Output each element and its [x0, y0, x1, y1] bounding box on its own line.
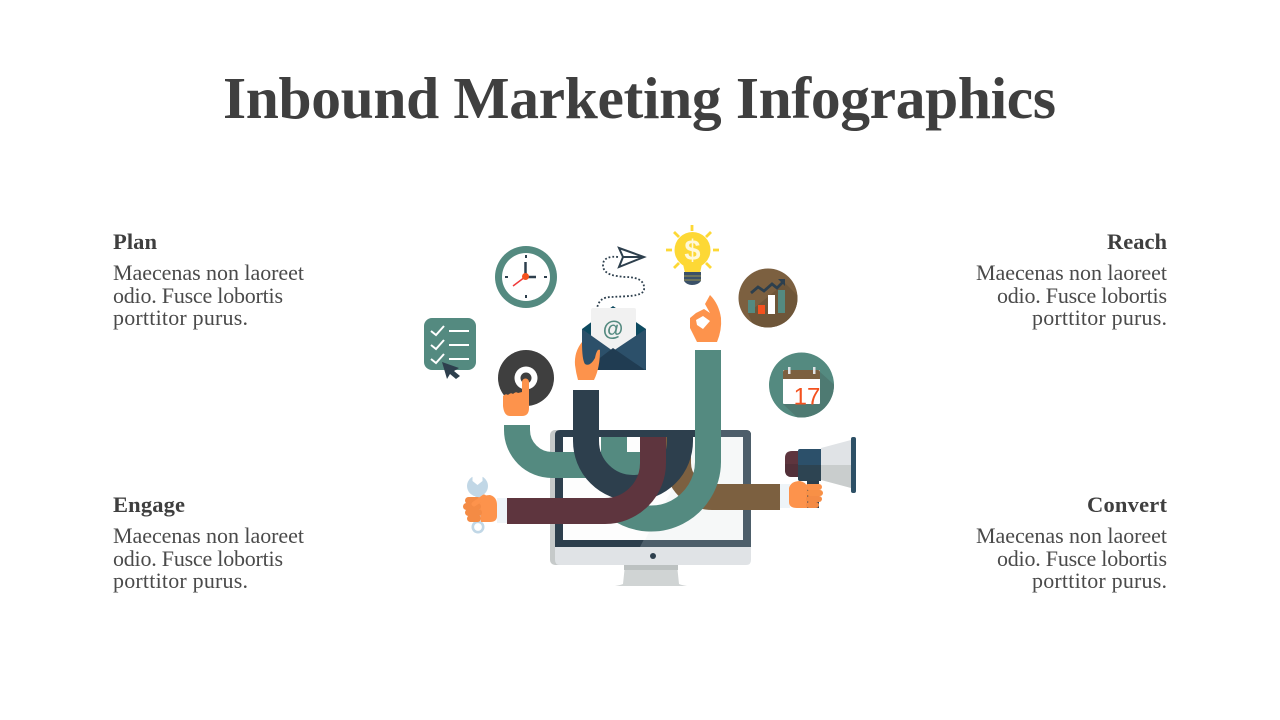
text block: Reach — [976, 229, 1167, 330]
icon: envelope: @ — [603, 318, 623, 341]
text block: Engage: Engage — [113, 492, 185, 517]
text block: Reach: porttitor purus. — [1032, 305, 1167, 330]
icon: hand with wrench — [463, 474, 507, 532]
icon: calendar badge: 17 — [794, 384, 820, 410]
monitor — [550, 430, 751, 586]
icon: megaphone — [785, 437, 856, 508]
arm: maroon — [507, 437, 653, 511]
text block: Plan: Plan — [113, 229, 157, 254]
text block: Engage: Maecenas non laoreet — [113, 523, 304, 548]
icon: growth chart badge — [738, 268, 800, 330]
central illustration — [424, 225, 856, 586]
title: Inbound Marketing Infographics — [223, 65, 1056, 131]
text block: Reach: Maecenas non laoreet — [976, 260, 1167, 285]
icon: light bulb with dollar: $ — [684, 235, 701, 267]
icon: hand holding envelope — [575, 342, 600, 380]
icon: pointing hand — [503, 378, 529, 416]
text block: Convert: odio. Fusce lobortis — [997, 546, 1167, 571]
arm: dark navy — [586, 390, 680, 488]
icon: OK hand — [690, 295, 721, 342]
text block: Engage: odio. Fusce lobortis — [113, 546, 283, 571]
text block: Plan: odio. Fusce lobortis — [113, 283, 283, 308]
icon: envelope — [582, 306, 646, 370]
arm: green left — [517, 425, 645, 467]
text block: Plan — [113, 229, 304, 330]
icon: target button — [498, 350, 554, 406]
arm: brown — [678, 437, 780, 497]
icon: calendar badge — [769, 352, 834, 418]
icon: light bulb with dollar — [666, 225, 719, 285]
text block: Convert: porttitor purus. — [1032, 568, 1167, 593]
text block: Convert: Maecenas non laoreet — [976, 523, 1167, 548]
arm: green right — [618, 350, 708, 519]
text block: Reach: Reach — [1107, 229, 1167, 254]
icon: hand holding megaphone — [780, 481, 823, 508]
text block: Convert: Convert — [1087, 492, 1168, 517]
text block: Plan: Maecenas non laoreet — [113, 260, 304, 285]
text block: Convert — [976, 492, 1168, 593]
icon: clock — [495, 246, 557, 308]
icon: checklist with cursor — [424, 318, 476, 379]
text block: Engage — [113, 492, 304, 593]
icon: paper plane with dotted trail — [597, 248, 644, 308]
text block: Engage: porttitor purus. — [113, 568, 248, 593]
text block: Plan: porttitor purus. — [113, 305, 248, 330]
text block: Reach: odio. Fusce lobortis — [997, 283, 1167, 308]
